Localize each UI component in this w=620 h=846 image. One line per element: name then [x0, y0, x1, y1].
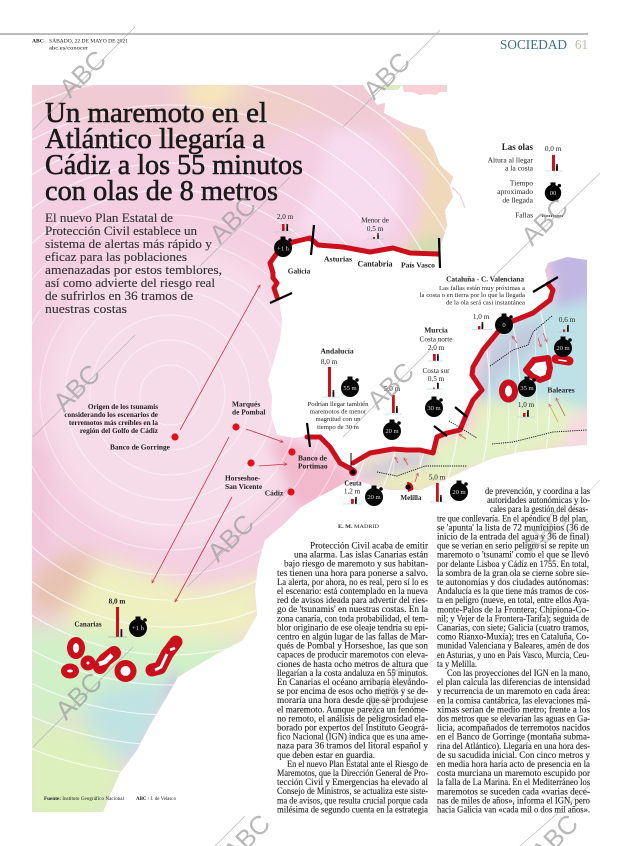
origin labels: terremotos más creíbles en la	[69, 419, 158, 427]
article column 1: centro en algún lugar de las fallas de Mar-	[277, 632, 428, 642]
article column 1: zona canaria, con toda probabilidad, el tem-	[277, 613, 428, 623]
origin labels: Horseshoe-	[225, 474, 261, 482]
article column 2: en Asturias, y uno en País Vasco, Murcia, Ceu-	[437, 650, 589, 660]
subtitle: sistema de alertas más rápido y	[45, 236, 213, 251]
Catalonia callout: Cataluña - C. Valenciana	[446, 274, 524, 284]
watermarks: ABC	[47, 358, 106, 417]
wave height: Cantabrian: Menor de	[361, 216, 389, 224]
source: ABC / J. de Velasco	[136, 797, 176, 802]
article column 1: Consejo de Ministros, se actualiza este siste-	[277, 786, 428, 796]
article column 1: llegarían a la costa andaluza en 55 minutos.	[277, 668, 428, 678]
Catalonia callout: Las fallas están muy próximas a	[439, 285, 525, 292]
Catalonia callout: de la ola será casi instantánea	[446, 299, 525, 306]
origin labels: de Pombal	[232, 408, 265, 416]
article column 2: Con las proyecciones del IGN en la mano,	[447, 668, 590, 678]
article column 1: borado por expertos del Instituto Geográ-	[277, 722, 428, 732]
Canary islands	[64, 640, 176, 679]
article column 2: rina del Atlántico). Llegaría en una hora des-	[437, 741, 590, 751]
Ceuta labels: Ceuta	[344, 480, 362, 488]
watermarks: ABC	[361, 356, 420, 415]
byline: E. M. MADRID	[338, 524, 379, 530]
region labels: Asturias	[324, 254, 352, 264]
source	[44, 797, 176, 802]
Ceuta and Melilla markers	[349, 468, 413, 492]
tsunami origin points	[171, 423, 296, 496]
region labels	[288, 254, 435, 276]
article column 1: naza para 36 tramos del litoral español y	[277, 741, 429, 751]
stopwatches: +1 h	[277, 246, 290, 252]
article column 2: ximas serían de medio metro; frente a los	[437, 704, 591, 714]
article column 1: fico Nacional (IGN) indica que es una ame-	[277, 732, 428, 742]
article column 1: Maremotos, que la Dirección General de Pro-	[277, 768, 428, 778]
legend: Altura al llegar	[488, 156, 533, 164]
article column 2: hacia Galicia van «cada mil o dos mil años».	[437, 804, 590, 814]
article column 2: el plan calcula las diferencias de intensidad	[437, 677, 590, 687]
stopwatches: 35 m	[520, 385, 535, 392]
wave height: Galicia: 2,0 m	[277, 213, 294, 221]
Balearic labels	[517, 386, 575, 417]
watermarks: ABC	[203, 190, 262, 249]
article column 1: Protección Civil acaba de emitir	[310, 540, 428, 550]
Melilla labels	[400, 474, 447, 502]
watermarks: ABC	[49, 666, 108, 725]
article column 1: tección Civil y Emergencias ha elevado al	[277, 777, 428, 787]
region labels: Cantabria	[357, 260, 393, 268]
article column 2: maremotos se suceden cada «varias dece-	[437, 786, 590, 796]
article column 1: go de 'tsunamis' en nuestras costas. En la	[277, 604, 428, 614]
wave height: Catalonia: 1,0 m	[473, 313, 490, 321]
title: Atlántico llegaría a	[45, 124, 266, 155]
wave height: Cantabrian: 0,5 m	[367, 225, 384, 233]
article column 2: la falla de La Marina. En el Mediterráneo los	[437, 777, 590, 787]
legend: aproximado	[497, 187, 533, 196]
map details: Biscay coast strip	[375, 85, 465, 208]
Ceuta labels: 1,2 m	[344, 488, 361, 496]
legend: a la costa	[505, 164, 534, 172]
wave height: Balearic north	[558, 316, 576, 332]
article column 2: como Rianxo-Muxía); tres en Cataluña, Co-	[437, 632, 589, 642]
Catalonia callout: la costa o en tierra por lo que la llegada	[420, 292, 525, 299]
article column 2: maremoto o 'tsunami' como el que se llevó	[437, 550, 589, 560]
title	[45, 98, 303, 207]
watermarks: ABC	[515, 503, 574, 562]
legend	[488, 142, 563, 220]
article column 1: ma de avisos, que resulta crucial porque cada	[277, 795, 428, 805]
legend: Tiempo	[510, 178, 533, 188]
article column 1: En Canarias el océano arribaría elevándo-	[277, 677, 428, 687]
Melilla labels: Melilla	[400, 494, 422, 502]
article column 1: bajo riesgo de maremoto y sus habitan-	[284, 559, 428, 569]
article column 2: nas de miles de años», informa el IGN, pero	[437, 795, 590, 805]
article column 2: Canarias, con siete; Galicia (cuatro tramos,	[437, 622, 589, 632]
header bar: SOCIEDAD	[500, 38, 567, 53]
article column 1: tes tienen una hora para ponerse a salvo.	[277, 568, 428, 578]
watermarks: ABC	[359, 660, 418, 719]
region labels: País Vasco	[401, 260, 435, 270]
article column 1: capaces de producir maremotos con eleva-	[277, 650, 428, 660]
article column 2: de su sacudida inicial. Con cinco metros y	[437, 750, 590, 760]
origin labels: Banco de Gorringe	[110, 442, 171, 452]
Andalucia labels: 8,0 m	[321, 358, 338, 366]
article column 2: por delante Lisboa y Cádiz en 1755. En total,	[437, 559, 589, 569]
wave height: Balearic north: 0,6 m	[559, 316, 576, 324]
origin labels: Portimao	[298, 462, 328, 470]
article column 1: milésima de segundo cuenta en la estrategia	[277, 804, 428, 814]
origin labels: región del Golfo de Cádiz	[80, 427, 159, 435]
stopwatches: 30 m	[427, 405, 442, 412]
stopwatches: 20 m	[385, 428, 400, 435]
article column 1: qués de Pombal y Horseshoe, las que son	[277, 641, 429, 651]
region labels: Galicia	[288, 266, 311, 276]
watermarks: ABC	[357, 46, 416, 105]
Andalucia labels: tiempo de 30 m	[317, 424, 360, 431]
legend: de llegada	[502, 196, 534, 204]
article column 1: red de avisos ideada para advertir del ries-	[277, 595, 428, 605]
article column 2: tre que conllevaría. En el apéndice B del plan,	[437, 513, 588, 523]
subtitle: Protección Civil establece un	[45, 223, 197, 238]
article column 2: autoridades autonómicas y lo-	[487, 495, 590, 505]
origin labels: Marqués	[232, 400, 260, 408]
header bar	[0, 33, 588, 53]
article column 2: en media hora haría acto de presencia en la	[437, 759, 590, 769]
article column 1: moraría una hora desde que se produjese	[277, 695, 428, 705]
stopwatches: 55 m	[343, 385, 358, 392]
header bar: 61	[575, 38, 588, 53]
watermarks: ABC	[201, 508, 260, 567]
subtitle: amenazadas por estos temblores,	[45, 262, 222, 277]
header bar: SÁBADO, 22 DE MAYO DE 2021	[49, 36, 128, 44]
article column 1	[277, 540, 429, 814]
subtitle: así como advierte del riesgo real	[45, 275, 215, 290]
article column 2: dos metros que se elevarían las aguas en Ga-	[437, 714, 590, 724]
watermarks: ABC	[53, 44, 112, 103]
origin labels: Cádiz	[265, 488, 284, 498]
legend: Fallas	[515, 210, 533, 220]
Andalucia labels: magnitud con un	[316, 416, 361, 423]
article column 2: Andalucía es la que tiene más tramos de cos-	[437, 586, 589, 596]
article column 1: ciones de hasta ocho metros de altura que	[277, 659, 428, 669]
stopwatches: 20 m	[556, 345, 571, 352]
article column 2: licia, acompañados de terremotos nacidos	[437, 723, 590, 733]
article column 2: de prevención, y coordina a las	[485, 486, 590, 496]
wave height: Catalonia	[472, 313, 492, 330]
article column 2: ta y Melilla.	[437, 659, 477, 669]
Andalucia labels: maremotos de menor	[310, 408, 367, 416]
article column 2: la sombra de la gran ola se cierne sobre sie-	[437, 568, 589, 578]
article column 2: y recurrencia de un maremoto en cada área:	[437, 686, 590, 696]
coast highlight: south coast	[307, 284, 553, 470]
Murcia labels: Murcia	[424, 326, 448, 334]
origin labels: Origen de los tsunamis	[88, 403, 158, 411]
article column 1: La alerta, por ahora, no es real, pero sí lo es	[277, 577, 428, 587]
Andalucia labels: 5,0 m	[384, 385, 401, 393]
origin labels	[64, 400, 328, 498]
legend: 0,0 m	[545, 145, 562, 153]
Canarias labels: Canarias	[74, 620, 102, 628]
stopwatches: 0	[502, 322, 506, 329]
Melilla labels: 5,0 m	[429, 474, 446, 482]
Balearic islands	[502, 358, 569, 400]
watermarks: ABC	[515, 192, 574, 251]
article column 1: que deben estar en guardia.	[277, 750, 375, 760]
Murcia labels: Costa norte	[420, 336, 452, 344]
subtitle: nuestras costas	[45, 301, 127, 316]
article column 1: una alarma. Las islas Canarias están	[294, 550, 429, 560]
title: Cádiz a los 55 minutos	[45, 150, 303, 181]
article column 2	[437, 486, 591, 814]
Canarias labels	[74, 598, 127, 637]
Murcia labels: 2,0 m	[428, 344, 445, 352]
stopwatches: 20 m	[452, 489, 467, 496]
stopwatches: +1 h	[132, 625, 145, 632]
subtitle: El nuevo Plan Estatal de	[45, 210, 173, 225]
map: sea and colour bands	[32, 85, 587, 812]
title: Un maremoto en el	[45, 98, 267, 129]
Andalucia labels	[308, 346, 402, 431]
article column 1: se por encima de esos ocho metros y se de-	[277, 686, 428, 696]
origin labels: considerando los escenarios de	[64, 411, 158, 419]
article column 1: no remoto, el análisis de peligrosidad ela-	[277, 713, 428, 723]
boundary ticks	[270, 225, 558, 467]
article column 1: En el nuevo Plan Estatal ante el Riesgo de	[287, 759, 428, 769]
article column 2: cales para la gestión del desas-	[490, 504, 588, 514]
article column 2: costa murciana un maremoto escupido por	[437, 768, 590, 778]
Canarias labels: 8,0 m	[109, 598, 125, 606]
header bar: ABC	[32, 38, 44, 44]
subtitle	[45, 210, 222, 316]
wave height: Cantabrian	[361, 216, 389, 239]
Andalucia labels: Andalucía	[320, 346, 354, 356]
stopwatches	[129, 236, 572, 637]
title: con olas de 8 metros	[45, 176, 278, 207]
article column 1: el maremoto. Aunque parezca un fenóme-	[277, 704, 428, 714]
source: Fuente: Instituto Geográfico Nacional	[44, 797, 125, 802]
article column 2: monte-Palos de la Frontera; Chipiona-Co-	[437, 604, 589, 614]
stopwatches: 20 m	[367, 494, 382, 501]
propagation arrows	[152, 285, 287, 602]
article column 1: blor originario de ese oleaje tendría su epi-	[277, 622, 428, 632]
origin labels: Banco de	[298, 454, 328, 462]
header bar: abc.es/conocer	[49, 46, 88, 52]
article column 2: munidad Valenciana y Baleares, amén de dos	[437, 641, 589, 651]
Murcia labels: Costa sur	[423, 367, 450, 375]
Murcia labels: 0,5 m	[428, 375, 445, 383]
fault lines	[377, 316, 587, 476]
subtitle: de sufrirlos en 36 tramos de	[45, 288, 193, 303]
Andalucia labels: Podrían llegar también	[308, 401, 369, 408]
article column 2: inicio de la entrada del agua y 36 de final)	[437, 532, 589, 542]
article column 1: el escenario: está contemplado en la nueva	[277, 586, 428, 596]
Catalonia callout	[420, 274, 525, 306]
legend: 00	[550, 190, 557, 197]
small wave arrows	[395, 333, 565, 482]
coast highlight: north coast	[270, 238, 438, 297]
Ceuta labels	[343, 480, 362, 504]
article column 2: que se verían en serio peligro si se repite un	[437, 541, 589, 551]
article column 2: ta en peligro (nueve, en total, entre ellos Aya-	[437, 595, 589, 605]
origin labels: San Vicente	[225, 482, 263, 491]
article column 2: se 'apunta' la lista de 72 municipios (36 de	[437, 522, 589, 532]
article column 2: nil; y Vejer de la Frontera-Tarifa); seguida de	[437, 613, 589, 623]
Balearic labels: 1,0 m	[518, 401, 535, 409]
article column 2: en el Banco de Gorringe (montaña subma-	[437, 732, 590, 742]
article column 2: en la cornisa cantábrica, las elevaciones má-	[437, 695, 590, 705]
subtitle: eficaz para las poblaciones	[45, 249, 187, 264]
legend: Las olas	[502, 142, 533, 152]
Balearic labels: Baleares	[547, 386, 575, 394]
Murcia labels	[420, 326, 452, 389]
article column 2: te autonomías y dos ciudades autónomas:	[437, 577, 589, 587]
wave height: Galicia	[274, 213, 296, 232]
